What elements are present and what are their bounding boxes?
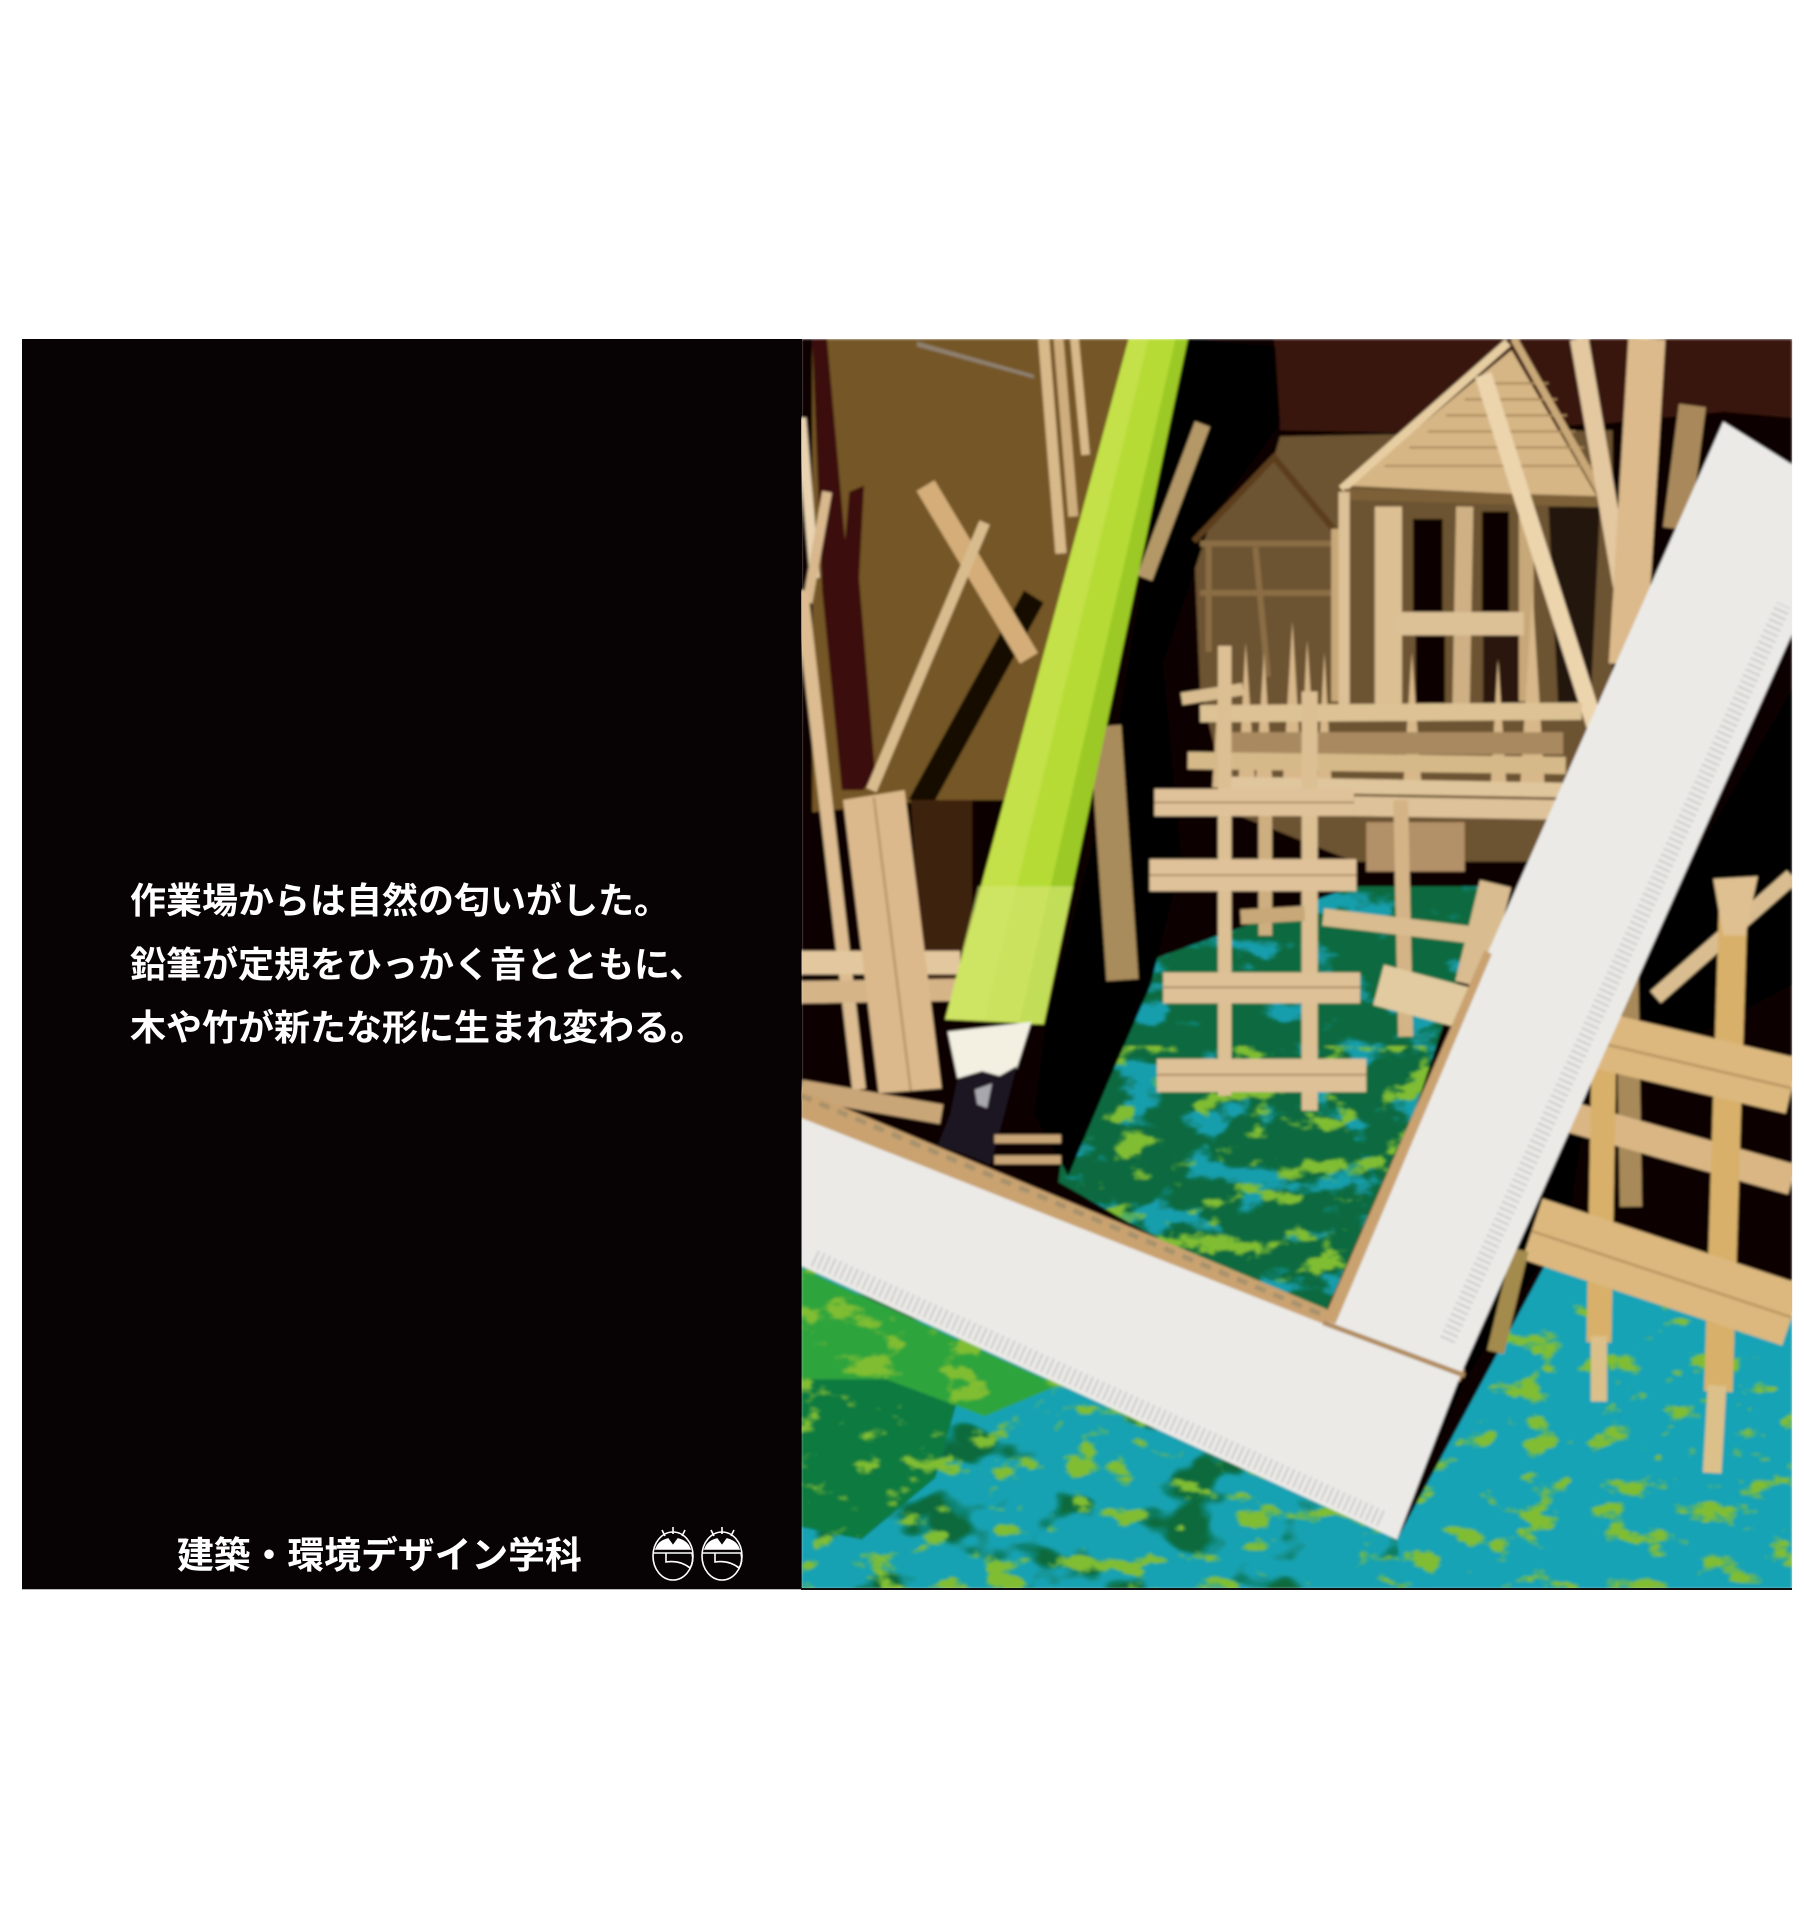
pencil: green pencil with black tip (938, 339, 1188, 1165)
text block: caption: 作業場からは自然の匂いがした。 (130, 880, 670, 921)
fence: right fence rails and posts (1496, 876, 1792, 1473)
wall: left wall shadows (812, 339, 1044, 800)
house: front house (1342, 339, 1600, 708)
text block: caption: 鉛筆が定規をひっかく音とともに、 (130, 944, 705, 984)
ground: lower-right teal (1396, 1265, 1792, 1588)
wall: back wall behind houses (1194, 430, 1612, 862)
logo: left face (653, 1527, 693, 1580)
ruler: L-shaped set square (801, 422, 1792, 1539)
heading: department name: 建築・環境デザイン学科 (177, 1535, 582, 1576)
shadow: right black area (1397, 689, 1792, 1539)
logo: two eye-shaped e faces (653, 1527, 742, 1580)
wall: ceiling (1274, 339, 1792, 433)
back sticks: left cluster (801, 339, 1203, 1114)
ruler ticks: horizontal arm (815, 1258, 1381, 1519)
text block: caption: 木や竹が新たな形に生まれ変わる。 (130, 1007, 706, 1048)
photo base line (801, 1588, 1792, 1590)
house: rear house (1194, 457, 1335, 701)
shadow: black shadow beside pencil (1034, 339, 1280, 1176)
ground: lower-left green and teal (801, 1265, 1404, 1588)
shadow: left dark wall (911, 800, 972, 997)
ladder: posts and cross planks (1150, 646, 1496, 1111)
ground: central green area (1056, 884, 1480, 1310)
panel: black text panel (22, 339, 802, 1590)
text block: caption (130, 880, 706, 1048)
wall: left cardboard wall (812, 339, 1145, 812)
logo: right face (702, 1527, 742, 1580)
photo: model with pencil and set square (801, 339, 1792, 1589)
sticks: tall right sticks (1483, 339, 1692, 726)
ruler ticks: vertical arm (1447, 605, 1784, 1340)
roof: plank gable (1348, 350, 1598, 498)
deck: pointed spikes and rails (1182, 590, 1582, 871)
